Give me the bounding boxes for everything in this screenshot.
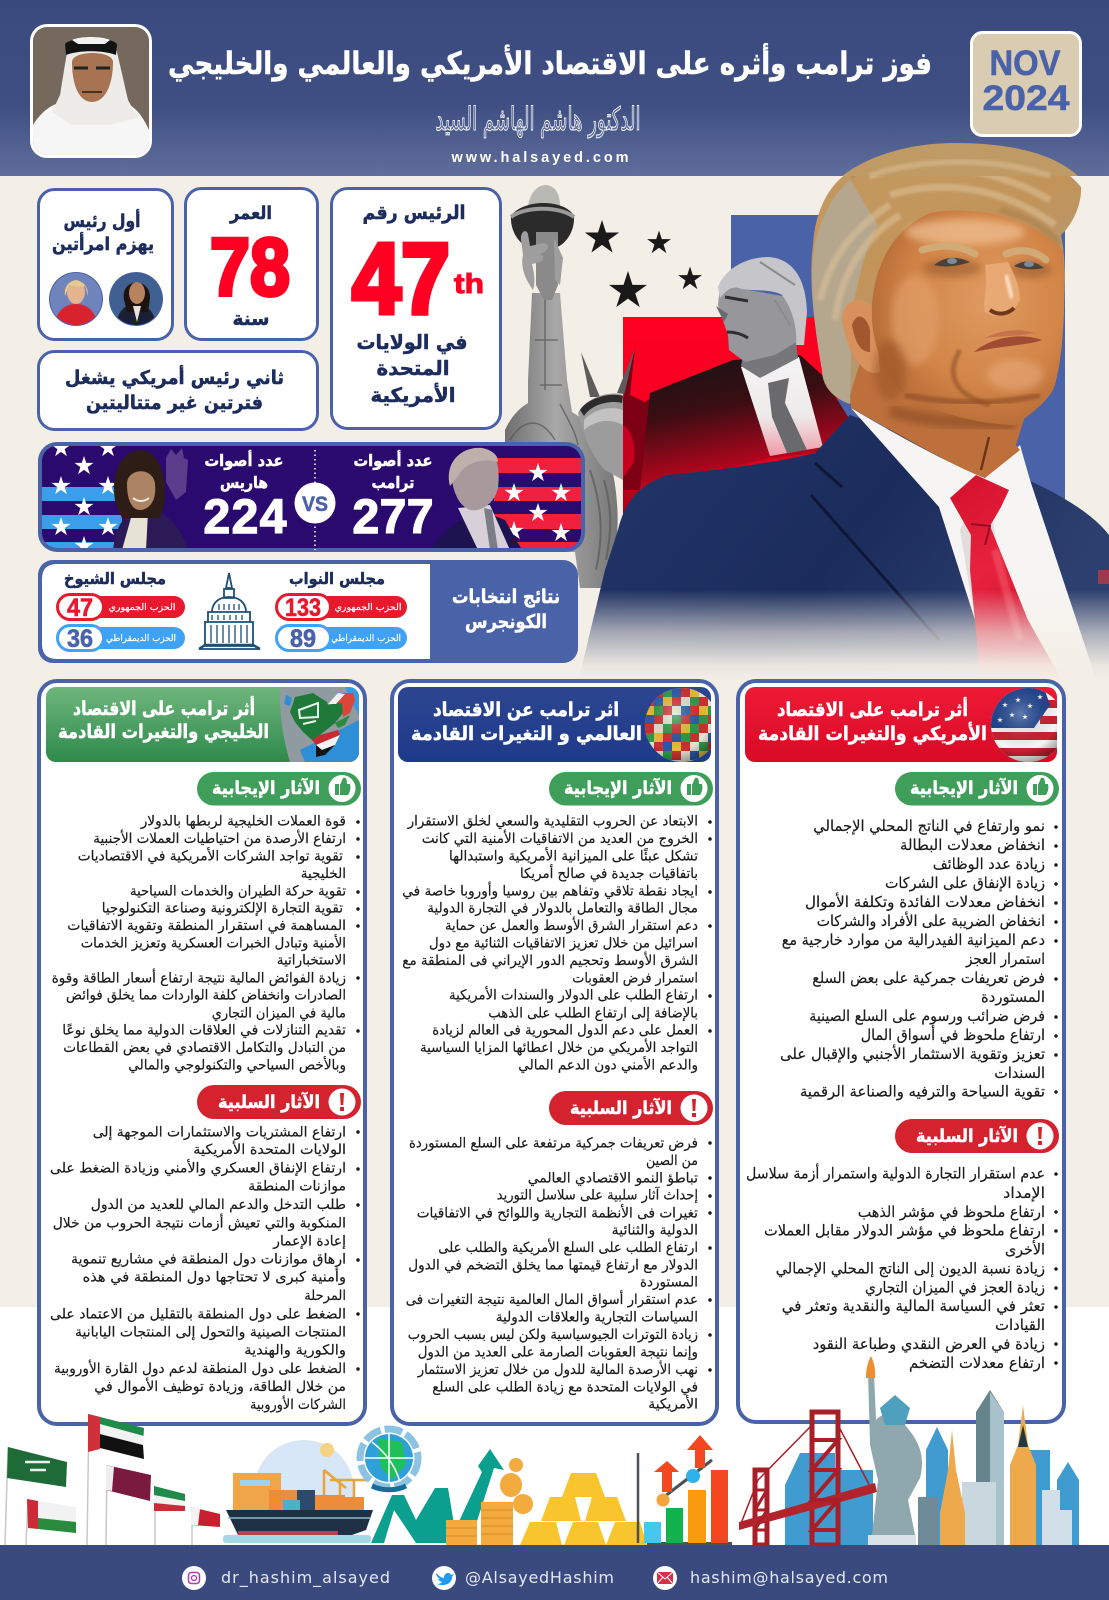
footer <box>0 1545 1109 1600</box>
list: global negative effects: ارتفاع الطلب على السلع الأمريكية والطلب على <box>438 1238 698 1256</box>
list: global negative effects: المستوردة <box>640 1275 698 1291</box>
card: first president to defeat two women: يهزم امرأتين <box>52 232 154 255</box>
statue head <box>578 394 623 480</box>
list: American positive effects: زيادة الإنفاق على الشركات <box>885 874 1045 892</box>
list: Gulf positive effects: تقوية التجارة الإلكترونية وصناعة التكنولوجيا <box>102 901 343 917</box>
list: American positive effects: تعزيز وتقوية الاستثمار الأجنبي والإقبال على <box>780 1044 1045 1064</box>
list: American negative effects: زيادة نسبة الديون إلى الناتج المحلي الإجمالي <box>776 1260 1045 1278</box>
red half of statue <box>623 348 687 490</box>
list: Gulf negative effects: المنكوبة والتي تعيش أزمات نتيجة الحروب من خلال <box>53 1213 346 1231</box>
statue <box>868 1372 922 1535</box>
ear <box>842 300 880 373</box>
icon: globe of flags <box>645 688 711 762</box>
card: age 78: 78 <box>210 222 290 313</box>
list: global positive effects <box>402 814 710 1074</box>
chin shading <box>905 395 1040 402</box>
house of representatives <box>276 569 407 653</box>
list: global positive effects: الابتعاد عن الحروب التقليدية والسعي لخلق الاستقرار <box>407 814 698 830</box>
neck <box>850 330 1030 478</box>
list: global negative effects: تباطؤ النمو الاقتصادي العالمي <box>528 1170 698 1186</box>
hair overlap on header <box>842 143 1078 176</box>
list: American positive effects: انخفاض معدلات الفائدة وتكلفة الأموال <box>805 892 1045 911</box>
electoral votes banner <box>38 438 585 554</box>
flag stripes: Harris side <box>42 446 122 548</box>
date badge: 2024 <box>982 79 1070 118</box>
icon: capitol building <box>199 573 260 649</box>
panel heading: global <box>398 687 719 762</box>
portrait: Trump <box>431 448 522 550</box>
rising bar chart <box>638 1435 732 1546</box>
panel heading: Gulf: الخليجي والتغيرات القادمة <box>58 721 269 743</box>
VS divider <box>294 450 336 550</box>
list: global positive effects: اسرائيل من خلال تعزيز الاتفاقيات الثنائية مع دول <box>429 935 698 951</box>
website: www.halsayed.com <box>450 150 628 166</box>
badge: positive effects <box>197 772 361 806</box>
colour blocks behind portrait <box>623 215 1065 517</box>
list: American positive effects: فرض تعريفات جمركية على بعض السلع <box>812 969 1045 987</box>
pale fade over lower portrait <box>570 590 1109 682</box>
list: American negative effects: القيادات <box>995 1316 1045 1334</box>
main portrait of Donald Trump <box>570 143 1109 682</box>
badge: negative effects <box>549 1091 713 1125</box>
list: global positive effects: باتفاقيات جديدة في صالح أمريكا <box>520 864 698 882</box>
list: American positive effects: ارتفاع ملحوظ في أسواق المال <box>861 1025 1045 1045</box>
list: American negative effects: الأخرى <box>1005 1240 1045 1258</box>
list: American negative effects: تعثر في السياسة المالية والنقدية وتعثر في <box>782 1297 1045 1316</box>
torch flame <box>528 185 560 206</box>
crown spikes <box>581 348 635 397</box>
list: global negative effects: زيادة التوترات الجيوسياسية ولكن ليس بسبب الحروب <box>408 1327 698 1343</box>
list: global negative effects: السياسات التجارية والعلاقات الدولية <box>496 1309 698 1325</box>
house of representatives: 89 <box>290 625 316 653</box>
badge: negative effects: الآثار السلبية <box>218 1091 320 1113</box>
date badge <box>972 32 1080 136</box>
list: Gulf negative effects: المنتجات الصينية والتحول إلى المنتجات اليابانية <box>75 1324 346 1340</box>
senate: الحزب الديمقراطي <box>106 634 176 644</box>
list: Gulf positive effects: المساهمة في استقرار المنطقة وتقوية الاتفاقيات <box>67 918 346 934</box>
hair <box>811 143 1081 404</box>
card: age 78 <box>186 188 318 340</box>
badge: positive effects: الآثار الإيجابية <box>212 777 320 799</box>
email address: hashim@halsayed.com <box>690 1568 888 1587</box>
list: Gulf negative effects: الولايات المتحدة الأمريكية <box>193 1140 346 1158</box>
icon: American flag ball <box>991 688 1057 762</box>
list: Gulf positive effects: تقديم التنازلات في العلاقات الدولية مما يخلق نوعًا <box>62 1023 346 1039</box>
house of representatives: الحزب الديمقراطي <box>331 634 401 644</box>
list: global positive effects: ايجاد نقطة تلاقي وتفاهم بين روسيا وأوروبا خاصة في <box>402 881 698 899</box>
list: American negative effects: ارتفاع ملحوظ في مؤشر الذهب <box>858 1203 1045 1222</box>
congress title: الكونجرس <box>465 611 547 633</box>
list: Gulf positive effects: ارتفاع الأرصدة من احتياطيات العملات الأجنبية <box>93 829 346 847</box>
VS divider: VS <box>302 493 328 516</box>
list: global negative effects: الدولار مع ارتفاع قيمتها مما يخلق التضخم في الدول <box>408 1257 698 1273</box>
list: Gulf positive effects: الأمنية وتبادل الخبرات العسكرية وتعزيز الخدمات <box>81 933 346 951</box>
list: Gulf negative effects: موازنات المنطقة <box>248 1179 346 1195</box>
panel heading: Gulf <box>46 687 359 762</box>
badge: positive effects <box>549 772 713 806</box>
twitter handle: @AlsayedHashim <box>465 1568 614 1587</box>
author photo <box>30 24 152 158</box>
date badge: NOV <box>990 44 1061 83</box>
portrait: Hillary Clinton <box>49 272 103 326</box>
Trump votes: عدد أصوات <box>354 450 432 470</box>
list: American positive effects: السندات <box>994 1064 1045 1082</box>
panel: American economy <box>738 681 1065 1422</box>
calligraphic signature: الدكتور هاشم الهاشم السيد <box>436 100 640 138</box>
list: global positive effects: العمل على دعم الدول المحورية فى العالم لزيادة <box>432 1023 698 1039</box>
nose <box>984 262 1020 316</box>
list: Gulf negative effects: ارهاق موازنات دول المنطقة في مشاريع تنموية <box>71 1252 346 1268</box>
hand and torch handle <box>536 232 558 300</box>
list: American negative effects: زيادة في العرض النقدي وطباعة النقود <box>813 1335 1045 1354</box>
list: American positive effects: استمرار العجز <box>965 950 1045 968</box>
icon: black stars <box>585 220 702 307</box>
face <box>872 210 1064 425</box>
list: Gulf positive effects: الخليجية <box>301 866 346 882</box>
list: global positive effects: الشرق الأوسط وتحجيم الدور الإيراني فى المنطقة مع <box>402 951 698 969</box>
panel: Gulf economy <box>39 681 365 1424</box>
email address <box>653 1566 888 1590</box>
congress results panel <box>38 560 578 663</box>
lapel line <box>811 463 939 640</box>
panel heading: Gulf: أثر ترامب على الاقتصاد <box>73 696 255 720</box>
panel heading: global: اثر ترامب عن الاقتصاد <box>433 699 619 721</box>
Harris votes <box>204 450 287 544</box>
lapel pin <box>1098 570 1109 584</box>
list: global positive effects: الخروج من العديد من الاتفاقيات الأمنية التي كانت <box>422 829 698 847</box>
card: age 78: سنة <box>232 308 270 330</box>
portrait: Harris <box>113 448 188 550</box>
bottom illustration strip <box>5 1356 1079 1546</box>
badge: negative effects <box>895 1119 1059 1153</box>
badge: negative effects: الآثار السلبية <box>916 1125 1018 1147</box>
congress title: نتائج انتخابات <box>452 586 560 608</box>
list: American positive effects: نمو وارتفاع في الناتج المحلي الإجمالي <box>813 817 1045 836</box>
header band <box>0 0 1109 176</box>
list: Gulf positive effects: وبالأخص السياحي والتكنولوجي والمالي <box>128 1056 346 1074</box>
senate: 36 <box>67 625 93 653</box>
house of representatives: الحزب الجمهوري <box>334 603 402 613</box>
eyebrows <box>922 246 1046 260</box>
list: American positive effects: انخفاض الضريبة على الأفراد والشركات <box>817 911 1045 930</box>
list: global positive effects: مجال الطاقة والتعامل بالدولار في التجارة الدولية <box>427 901 698 917</box>
list: Gulf positive effects: قوة العملات الخليجية لربطها بالدولار <box>140 814 346 830</box>
list: global negative effects: من الصين <box>646 1153 698 1169</box>
list: global negative effects: وإنما نتيجة العقوبات الصارمة على العديد من الدول <box>418 1345 698 1361</box>
Trump votes: 277 <box>352 491 434 544</box>
list: Gulf positive effects: تقوية تواجد الشركات الأمريكية في الاقتصاديات <box>78 847 343 865</box>
badge: positive effects <box>895 772 1059 806</box>
list: global negative effects: الدولية والثنائية <box>612 1223 698 1239</box>
instagram handle: dr_hashim_alsayed <box>221 1568 390 1588</box>
list: Gulf positive effects: تقوية حركة الطيران والخدمات السياحية <box>130 883 346 899</box>
list: global positive effects: والدعم الأمني دون الدعم المالي <box>518 1056 698 1074</box>
list: American negative effects: ارتفاع ملحوظ في مؤشر الدولار مقابل العملات <box>764 1222 1045 1240</box>
list: American positive effects <box>780 817 1056 1100</box>
card: second non-consecutive president: فترتين غير متتاليتين <box>86 392 263 414</box>
necktie <box>950 475 1063 682</box>
list: Gulf negative effects: والكورية والهندية <box>244 1343 346 1359</box>
list: American positive effects: انخفاض معدلات البطالة <box>900 836 1045 854</box>
card: 47th president: 47 <box>352 223 450 335</box>
card: second non-consecutive president: ثاني رئيس أمريكي يشغل <box>65 365 284 389</box>
instagram handle <box>182 1566 390 1590</box>
Trump votes: ترامب <box>372 473 414 492</box>
list: Gulf negative effects: المرحلة <box>304 1288 346 1304</box>
list: global negative effects: عدم استقرار أسواق المال العالمية نتيجة التغيرات فى <box>406 1290 698 1308</box>
list: American positive effects: المستوردة <box>981 988 1045 1006</box>
raised arm and drapery <box>505 293 618 588</box>
Trump votes <box>352 450 434 544</box>
flags of the Gulf states <box>5 1414 220 1545</box>
list: American negative effects: زيادة العجز في الميزان التجاري <box>865 1278 1045 1298</box>
Harris votes: هاريس <box>220 473 268 492</box>
list: global negative effects: نهب الأرصدة المالية للدول من خلال تعزيز الاستثمار <box>417 1360 698 1378</box>
list: global negative effects <box>406 1135 710 1412</box>
globe icon <box>360 1429 418 1490</box>
list: American positive effects: دعم الميزانية الفيدرالية من موارد خارجية مع <box>782 931 1045 949</box>
list: global negative effects: فرض تعريفات جمركية مرتفعة على السلع المستوردة <box>409 1135 698 1151</box>
list: Gulf positive effects <box>52 814 358 1074</box>
list: American negative effects: عدم استقرار التجارة الدولية واستمرار أزمة سلاسل <box>746 1164 1045 1182</box>
shirt <box>851 408 1097 682</box>
panel heading: American <box>745 687 1065 762</box>
list: global positive effects: بالإضافة إلى ارتفاع الطلب على الذهب <box>488 1005 698 1021</box>
senate <box>58 569 185 653</box>
title: فوز ترامب وأثره على الاقتصاد الأمريكي والعالمي والخليجي <box>168 43 932 82</box>
Harris votes: عدد أصوات <box>204 450 284 470</box>
eyes <box>934 258 1044 269</box>
list: Gulf negative effects: طلب التدخل والدعم المالي للعديد من الدول <box>91 1197 346 1213</box>
panel heading: American: الأمريكي والتغيرات القادمة <box>758 722 987 745</box>
list: Gulf negative effects: الضغط على دول المنطقة بالتقليل من الاعتماد على <box>50 1306 346 1322</box>
list: Gulf negative effects: من خلال الطاقة، وزيادة توظيف الأموال في <box>94 1377 346 1395</box>
list: Gulf positive effects: مالية في الميزان التجاري <box>212 1005 346 1021</box>
badge: negative effects: الآثار السلبية <box>570 1097 672 1119</box>
list: Gulf negative effects: الضغط على دول المنطقة لدعم دول القارة الأوروبية <box>54 1359 346 1377</box>
twitter handle <box>432 1566 614 1590</box>
list: global negative effects: تغيرات فى الأنظمة التجارية واللوائح في الاتفاقيات <box>417 1203 698 1221</box>
torch gallery <box>511 203 574 248</box>
list: American positive effects: فرض ضرائب ورسوم على السلع الصينية <box>809 1007 1045 1025</box>
face light and shade <box>874 219 1052 405</box>
Harris votes: 224 <box>204 491 287 544</box>
list: American positive effects: زيادة عدد الوظائف <box>933 855 1045 873</box>
card: 47th president: المتحدة <box>376 356 450 380</box>
list: Gulf positive effects: الاستخباراتية <box>277 953 346 969</box>
badge: negative effects <box>197 1085 361 1119</box>
panel heading: American: أثر ترامب على الاقتصاد <box>777 697 968 721</box>
list: global positive effects: التواجد الأمريكي من خلال اعطائها المزايا السياسية <box>420 1038 698 1056</box>
panel heading: global: العالمي و التغيرات القادمة <box>411 723 642 745</box>
card: 47th president: الأمريكية <box>370 382 456 407</box>
icon: Gulf map on a globe <box>280 687 359 762</box>
list: Gulf negative effects <box>50 1124 358 1413</box>
badge: positive effects: الآثار الإيجابية <box>564 777 672 799</box>
list: American negative effects: ارتفاع معدلات التضخم <box>909 1354 1045 1372</box>
list: global positive effects: دعم استقرار الشرق الأوسط والعمل عن حماية <box>445 916 698 934</box>
list: American negative effects <box>746 1164 1056 1372</box>
list: global positive effects: ارتفاع الطلب على الدولار والسندات الأمريكية <box>449 986 698 1004</box>
growth arrow and coins <box>371 1449 533 1545</box>
badge: positive effects: الآثار الإيجابية <box>910 777 1018 799</box>
list: Gulf negative effects: الشركات الأوروبية <box>250 1395 346 1413</box>
senate: 47 <box>67 594 93 622</box>
list: American positive effects: تقوية السياحة والترفيه والصناعة الرقمية <box>800 1082 1045 1100</box>
card: 47th president: th <box>454 268 484 299</box>
card: 47th president: الرئيس رقم <box>362 202 466 224</box>
house of representatives: مجلس النواب <box>289 569 385 588</box>
list: global negative effects: إحداث آثار سلبية على سلاسل التوريد <box>497 1187 698 1204</box>
card: second non-consecutive president <box>38 352 318 430</box>
list: Gulf negative effects: ارتفاع الإنفاق العسكري والأمني وزيادة الضغط على <box>50 1159 346 1177</box>
card: first president to defeat two women: أول رئيس <box>64 209 140 232</box>
panel: global economy <box>392 681 719 1424</box>
list: Gulf negative effects: وأمنية كبرى لا تحتاجها دول المنطقة في هذه <box>83 1268 346 1286</box>
statue of liberty <box>505 185 687 588</box>
list: Gulf negative effects: ارتفاع المشتريات والاستثمارات الموجهة إلى <box>93 1124 346 1140</box>
gold bars <box>520 1473 647 1545</box>
senate: الحزب الجمهوري <box>108 603 176 613</box>
card: first president to defeat two women <box>38 190 172 340</box>
senate: مجلس الشيوخ <box>64 569 166 588</box>
list: American negative effects: الإمداد <box>1003 1184 1045 1202</box>
card: 47th president <box>332 188 500 428</box>
suit jacket <box>578 415 1109 682</box>
list: Gulf positive effects: الصادرات وانخفاض كلفة الواردات مما يخلق فوائض <box>66 988 346 1004</box>
congress title <box>452 586 560 633</box>
list: Gulf positive effects: من التبادل والتكامل الاقتصادي في بعض القطاعات <box>63 1040 346 1056</box>
portrait: Kamala Harris <box>109 272 163 326</box>
card: age 78: العمر <box>229 203 272 224</box>
small grayscale portrait <box>640 257 850 490</box>
list: global negative effects: في الولايات المتحدة مع زيادة الطلب على السلع <box>432 1379 698 1395</box>
list: Gulf positive effects: زيادة الفوائض المالية نتيجة ارتفاع أسعار الطاقة وقوة <box>52 968 346 986</box>
list: Gulf negative effects: إعادة الإعمار <box>272 1233 346 1249</box>
list: global negative effects: الأمريكية <box>648 1394 698 1412</box>
New York skyline with bridge and statue <box>739 1356 1079 1545</box>
mouth <box>974 336 1042 352</box>
list: global positive effects: استمرار فرض العقوبات <box>572 970 698 986</box>
container ship <box>223 1440 373 1543</box>
card: 47th president: في الولايات <box>356 330 468 355</box>
house of representatives: 133 <box>285 594 321 622</box>
list: global positive effects: تشكل عبئًا على الميزانية الأمريكية واستبدالها <box>449 847 698 865</box>
flag stripes: Trump side <box>494 458 581 549</box>
